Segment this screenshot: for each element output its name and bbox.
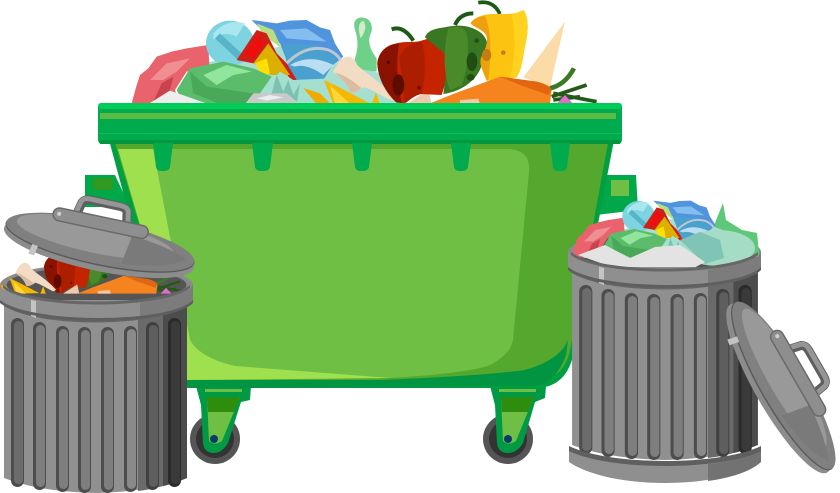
- right caster bracket: [490, 386, 546, 453]
- left trash can: [0, 183, 203, 493]
- right can clear plastic: [680, 230, 755, 266]
- right can paper heap: [578, 245, 705, 270]
- right can green bag: [700, 203, 760, 262]
- right can recyclable waste: [572, 201, 752, 258]
- green pepper: [425, 13, 487, 94]
- ice cream cone: [523, 22, 565, 87]
- right can lid: [710, 281, 840, 484]
- carrot: [428, 68, 597, 104]
- right can base flange: [569, 446, 761, 483]
- left can food waste: [0, 235, 187, 294]
- yellow pepper: [471, 2, 528, 81]
- left can body: [4, 300, 187, 493]
- left can lid: [0, 183, 203, 291]
- dumpster back handles: [85, 175, 638, 215]
- dumpster body: [109, 140, 614, 388]
- red pepper: [377, 28, 448, 103]
- lid tabs: [153, 143, 570, 171]
- left can rim: [0, 284, 193, 321]
- right trash can: [568, 201, 840, 484]
- left caster bracket: [196, 386, 251, 453]
- right wheel: [483, 414, 533, 464]
- right can inner rim: [568, 231, 761, 273]
- banana peel: [303, 80, 380, 104]
- left can inner rim: [0, 264, 193, 306]
- green bottle: [353, 17, 377, 72]
- recyclable waste: [132, 20, 397, 104]
- right can rim: [568, 251, 761, 288]
- garbage pile on top of dumpster: [132, 2, 597, 104]
- left wheel: [190, 414, 240, 464]
- dumpster lid: [98, 103, 622, 144]
- right can body: [572, 267, 758, 460]
- bone: [333, 57, 432, 104]
